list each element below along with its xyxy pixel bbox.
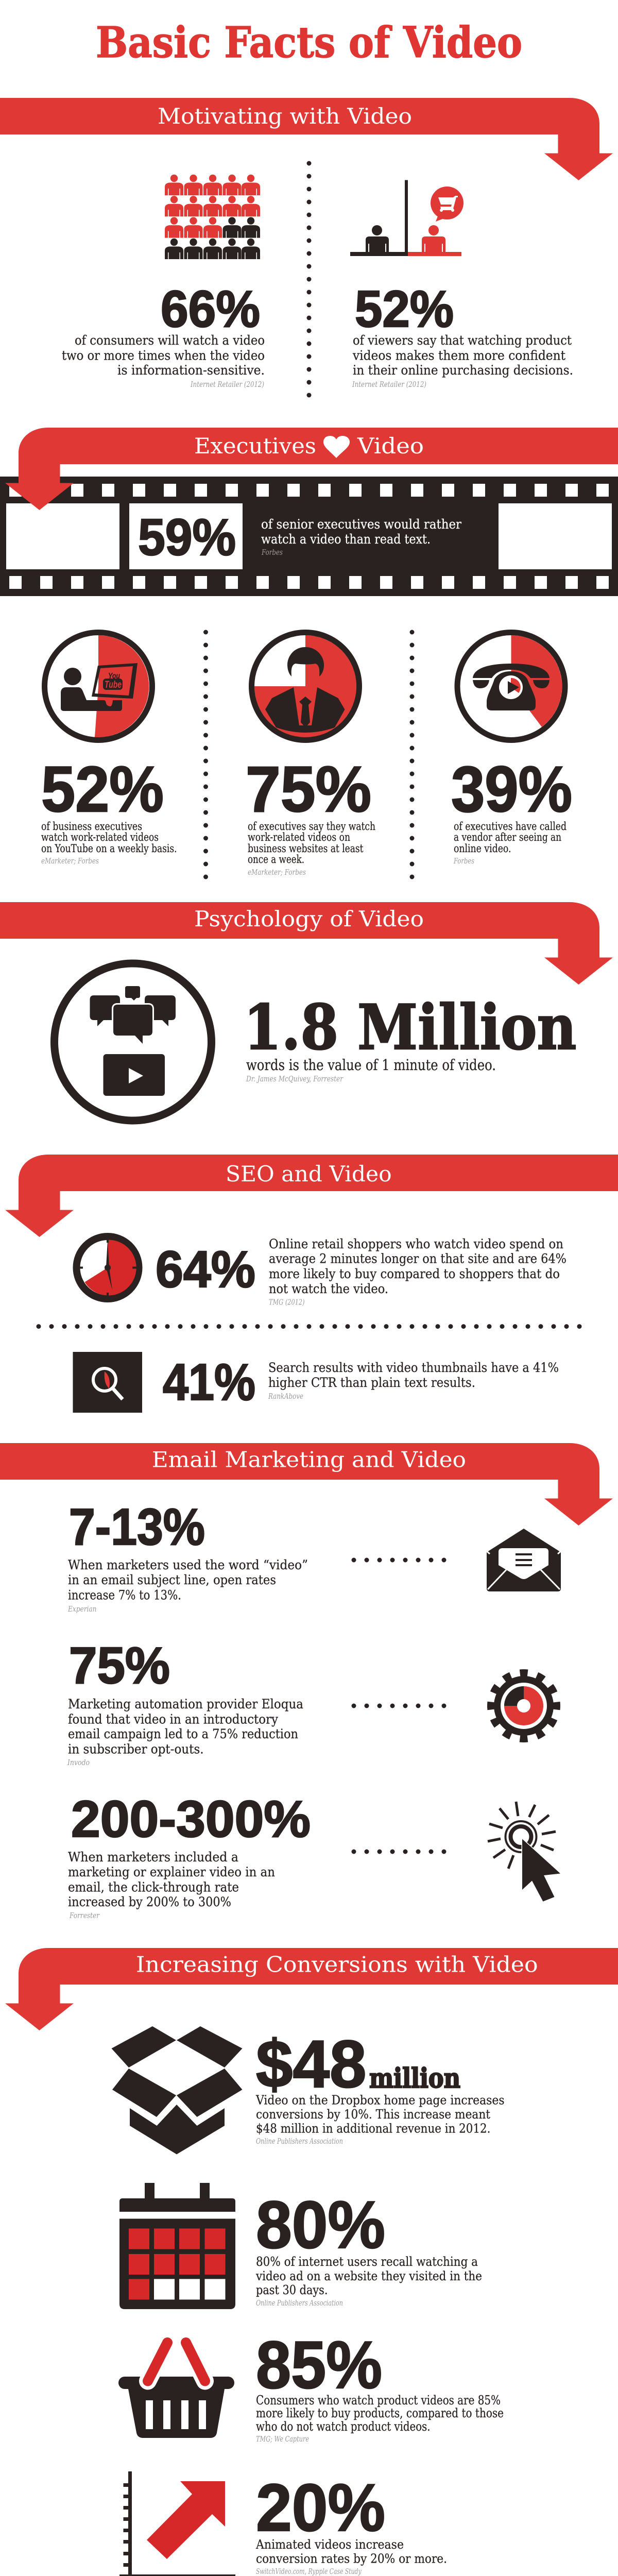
icon: clock 64 percent <box>76 1236 139 1299</box>
stat: 52 percent weekly: of business executives <box>41 820 142 833</box>
stat: 7-13 percent: increase 7% to 13%. <box>68 1588 181 1603</box>
stat: 1.8 million: words is the value of 1 minute of video. <box>246 1056 496 1074</box>
film strip with 59 percent stat: of senior executives would rather <box>261 517 461 532</box>
stat: 52 percent: videos makes them more confident <box>352 348 565 363</box>
stat: 75 percent opt-outs: Marketing automation provider Eloqua <box>68 1697 303 1711</box>
stat: 39 percent: Forbes <box>453 856 474 866</box>
panel: psychology of video <box>55 963 577 1121</box>
section banner: Psychology of Video <box>0 902 613 985</box>
stat: 85 percent: Consumers who watch product videos are 85% <box>256 2393 501 2408</box>
stat: 41 percent <box>163 1353 559 1411</box>
stat: 48 million: $48 million in additional revenue in 2012. <box>256 2121 490 2136</box>
film strip with 59 percent stat: 59% <box>138 509 236 566</box>
stat: 7-13 percent: Experian <box>67 1604 97 1614</box>
stat: 66 percent: 66% <box>161 280 260 338</box>
stat: 75 percent opt-outs: in subscriber opt-outs. <box>68 1742 204 1757</box>
stat: 20 percent conversion <box>255 2470 447 2576</box>
panel: SEO <box>39 1236 582 1413</box>
panel: motivating with video <box>62 163 573 397</box>
section banner: Email Marketing and Video: Email Marketing and Video <box>152 1447 466 1472</box>
stat: 64 percent: TMG (2012) <box>269 1297 305 1307</box>
icon: person watching YouTube: Tube <box>105 680 122 690</box>
stat: 85 percent: more likely to buy products, compared to those <box>256 2406 504 2420</box>
icon: dropbox <box>111 2026 242 2155</box>
section banner: SEO and Video: SEO and Video <box>226 1161 392 1187</box>
stat: 7-13 percent: in an email subject line, open rates <box>68 1572 276 1587</box>
stat: 75 percent: once a week. <box>248 853 304 866</box>
stat: 85 percent: TMG; We Capture <box>256 2434 309 2444</box>
stat: 52 percent weekly: eMarketer; Forbes <box>41 856 99 866</box>
stat: 75 percent: of executives say they watch <box>248 820 375 833</box>
stat: 80 percent <box>255 2187 482 2308</box>
stat: 75 percent: 75% <box>246 754 371 825</box>
stat: 41 percent: Search results with video thumbnails have a 41% <box>268 1360 559 1375</box>
stat: 7-13 percent: 7-13% <box>69 1498 205 1556</box>
stat: 52 percent: Internet Retailer (2012) <box>352 380 426 389</box>
stat: 48 million <box>255 2026 505 2146</box>
stat: 66 percent: of consumers will watch a video <box>75 333 265 348</box>
title: Basic Facts of Video <box>96 18 522 67</box>
section banner: Executives love Video: Executives <box>194 433 316 459</box>
film strip with 59 percent stat: watch a video than read text. <box>261 532 431 547</box>
stat: 52 percent weekly: on YouTube on a weekly basis. <box>41 842 177 855</box>
stat: 200-300 percent: 200-300% <box>71 1790 311 1848</box>
stat: 75 percent opt-outs: Invodo <box>67 1758 90 1767</box>
stat: 66 percent: Internet Retailer (2012) <box>190 380 264 389</box>
stat: 200-300 percent: marketing or explainer video in an <box>68 1865 275 1879</box>
stat: 20 percent conversion: SwitchVideo.com, Rypple Case Study <box>256 2567 362 2576</box>
stat: 75 percent <box>246 754 375 877</box>
icon: heart <box>323 436 350 458</box>
stat: 52 percent: in their online purchasing decisions. <box>353 363 573 378</box>
section banner: Executives love Video: Video <box>357 433 424 459</box>
stat: 80 percent: past 30 days. <box>256 2283 328 2297</box>
stat: 66 percent <box>62 280 265 389</box>
stat: 66 percent: two or more times when the video <box>62 348 265 363</box>
section banner: SEO and Video <box>5 1155 618 1237</box>
stat: 52 percent weekly: watch work-related videos <box>41 831 159 843</box>
stat: 48 million: $48 <box>256 2026 367 2102</box>
stat: 75 percent opt-outs: found that video in an introductory <box>68 1712 279 1727</box>
stat: 1.8 million: Dr. James McQuivey, Forrester <box>246 1074 344 1083</box>
stat: 48 million: million <box>369 2063 460 2094</box>
stat: 20 percent conversion: Animated videos increase <box>255 2537 404 2552</box>
film strip with 59 percent stat <box>0 477 618 596</box>
stat: 20 percent conversion: conversion rates by 20% or more. <box>256 2551 447 2566</box>
stat: 75 percent opt-outs: 75% <box>69 1637 170 1694</box>
stat: 48 million: conversions by 10%. This increase meant <box>256 2107 490 2122</box>
stat: 39 percent: a vendor after seeing an <box>454 831 561 843</box>
stat: 39 percent: online video. <box>454 842 511 855</box>
icon: calendar <box>119 2183 235 2309</box>
stat: 52 percent: of viewers say that watching product <box>353 333 572 348</box>
panel: conversions <box>111 2026 505 2576</box>
icon: growth chart arrow <box>119 2471 235 2576</box>
stat: 75 percent: business websites at least <box>248 842 364 855</box>
icon: people grid 66 percent <box>165 175 260 259</box>
stat: 80 percent: video ad on a website they visited in the <box>255 2269 482 2283</box>
stat: 48 million: Online Publishers Association <box>256 2137 343 2146</box>
stat: 52 percent weekly <box>41 754 177 866</box>
stat: 85 percent <box>256 2327 504 2444</box>
stat: 7-13 percent: When marketers used the word “video” <box>68 1557 308 1572</box>
section banner: Increasing Conversions with Video <box>5 1948 618 2030</box>
stat: 64 percent <box>156 1236 566 1307</box>
stat: 39 percent <box>451 754 572 866</box>
stat: 41 percent: RankAbove <box>268 1392 303 1401</box>
stat: 64 percent: more likely to buy compared to shoppers that do <box>269 1266 560 1281</box>
stat: 80 percent: 80% of internet users recall watching a <box>256 2255 478 2269</box>
stat: 66 percent: is information-sensitive. <box>117 363 265 378</box>
icon: person watching YouTube: You <box>108 672 120 681</box>
stat: 85 percent: who do not watch product videos. <box>256 2419 431 2434</box>
stat: 41 percent: 41% <box>163 1353 255 1411</box>
stat: 52 percent <box>352 280 573 389</box>
stat: 75 percent opt-outs <box>67 1637 303 1767</box>
stat: 75 percent: work-related videos on <box>248 831 350 843</box>
stat: 80 percent: 80% <box>256 2187 385 2262</box>
icon: envelope <box>487 1529 561 1591</box>
icon: telephone <box>457 633 565 740</box>
stat: 20 percent conversion: 20% <box>256 2470 385 2545</box>
stat: 75 percent: eMarketer; Forbes <box>248 868 306 877</box>
stat: 52 percent: 52% <box>355 280 454 338</box>
stat: 41 percent: higher CTR than plain text results. <box>268 1375 475 1390</box>
section banner: Motivating with Video <box>0 98 613 180</box>
section banner: Email Marketing and Video <box>0 1443 613 1526</box>
stat: 200-300 percent <box>68 1790 311 1920</box>
panel: email marketing <box>67 1498 561 1920</box>
icon: executive in suit <box>251 633 359 740</box>
stat: 200-300 percent: Forrester <box>69 1911 100 1920</box>
stat: 7-13 percent <box>67 1498 308 1614</box>
stat: 85 percent: 85% <box>256 2327 382 2402</box>
stat: 200-300 percent: increased by 200% to 300% <box>68 1894 231 1909</box>
stat: 200-300 percent: When marketers included a <box>68 1850 238 1865</box>
panel: executives three stats <box>41 632 572 878</box>
film strip with 59 percent stat: Forbes <box>261 548 283 557</box>
stat: 39 percent: of executives have called <box>454 820 566 833</box>
stat: 75 percent opt-outs: email campaign led to a 75% reduction <box>68 1726 298 1741</box>
stat: 64 percent: not watch the video. <box>269 1281 388 1296</box>
stat: 64 percent: Online retail shoppers who watch video spend on <box>269 1236 563 1251</box>
stat: 1.8 million: 1.8 Million <box>244 991 577 1064</box>
section banner: Psychology of Video: Psychology of Video <box>194 906 424 931</box>
stat: 64 percent: average 2 minutes longer on that site and are 64% <box>269 1251 566 1266</box>
icon: magnifier square <box>73 1352 142 1413</box>
section banner: Executives love Video <box>5 428 618 510</box>
stat: 64 percent: 64% <box>156 1241 255 1298</box>
stat: 200-300 percent: email, the click-through rate <box>68 1880 239 1895</box>
section banner: Increasing Conversions with Video: Increasing Conversions with Video <box>136 1952 538 1977</box>
icon: two shoppers with cart bubble <box>350 180 464 256</box>
icon: click cursor <box>488 1802 560 1902</box>
stat: 52 percent weekly: 52% <box>41 754 164 825</box>
stat: 39 percent: 39% <box>451 754 572 825</box>
stat: 80 percent: Online Publishers Association <box>256 2298 343 2308</box>
icon: shopping basket <box>118 2343 234 2438</box>
icon: gear <box>491 1673 557 1739</box>
stat: 48 million: Video on the Dropbox home page increases <box>255 2093 505 2108</box>
icon: person watching YouTube <box>44 633 152 740</box>
icon: chat bubbles and video <box>55 963 211 1121</box>
section banner: Motivating with Video: Motivating with Video <box>158 104 412 129</box>
